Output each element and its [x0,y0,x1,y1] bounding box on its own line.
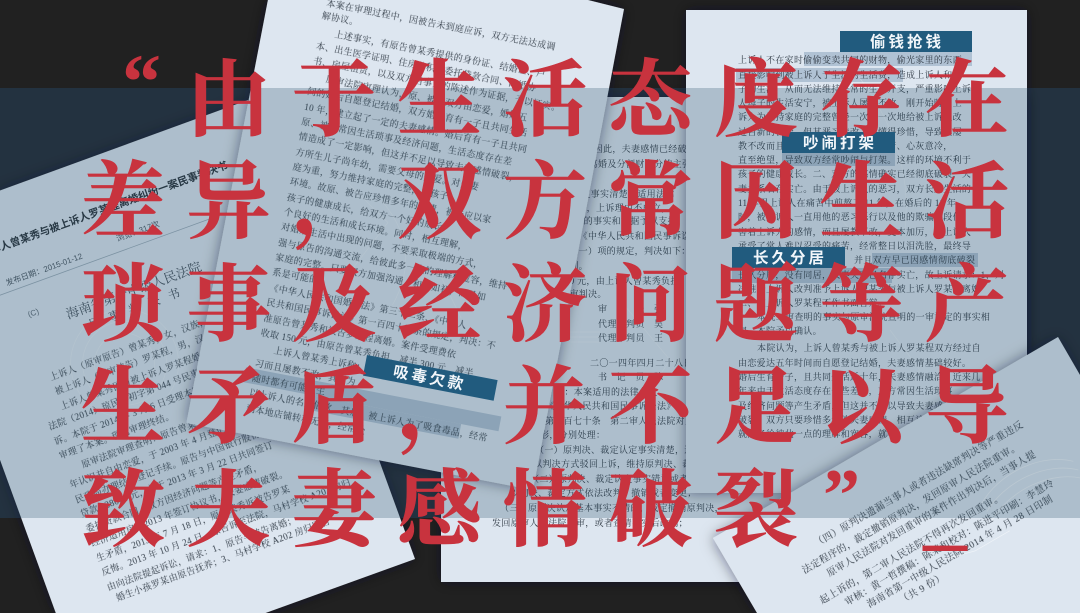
back page body text: 二〇一四年四月二十八日 [590,357,693,368]
back page body text: 审 判 长 张 [598,303,663,314]
right page body text: 诉人为维持家庭的完整曾经一次又一次地给被上诉人改 [738,111,962,122]
left page body text: 婚生小孩罗某由原告抚养；3、马村学校 A202 房归原告 [114,515,332,603]
back page watermark [570,300,670,420]
right page body text: 直至绝望，导致双方经常吵闹与打架。这样的环境不利于 [738,154,971,166]
left page document type: 民事判决书 [87,282,190,332]
left page body text: 贷款 128000 元，并于 2013 年 3 月 22 日共同签订 [79,439,275,520]
left page body text: 委托贷款合同，双方因经济问题等产生矛盾， [84,460,263,535]
left page body text: 被上诉人（原审被告）罗某程，男，汉族 [53,329,215,397]
back page body text: 依照《中华人民共和国民事诉讼法》 [560,230,709,241]
back page body text: 附：本案适用的法律条文 [555,386,658,397]
left page body text: 法院（2014）琼民一初字第 044 号民事判决，向本院提 [47,344,263,433]
right page body text: 教不改而且还吸毒，使上诉人十分痛苦、心灰意冷， [738,140,953,152]
back page body text: 书 记 员 陈 [598,371,664,382]
label: stealing money: 偷钱抢钱 [870,32,944,51]
centre page body text: 民共和国民事诉讼法》第一百四十四条的规定，判决：不 [266,296,497,352]
right page body text: 由恋爱达五年时间而自愿登记结婚，夫妻感情基础较好。 [738,357,971,369]
centre page body text: 原审法院审理认为，原、被告双方由恋爱，婚姻五 [325,73,529,124]
left page body text: 原审法院审理查明：原告曾某秀与被告罗某程于 2003 年 4 月 [80,374,318,470]
right page body text: 妻关系名存实亡。由于被上诉人的恶习，双方长期生活的 [738,183,971,195]
centre page body text: 上述事实，有原告曾某秀提供的身份证、结婚证、户 [333,28,546,81]
right page body text: 年来由于生活态度存在一些差异，双方常因生活琐事 [738,385,953,397]
back page body text: 发回原审人民法院重审，或者查清事实后改判； [492,517,688,529]
right page body text: 过自新的机会，但其恶习难改，不懂得珍惜，导致其屡 [738,126,962,138]
back page body text: 认定事实清楚，适用法律 [572,188,675,200]
back page body text: （三）原判决认定基本事实不清的，裁定撤销原判决， [500,502,724,514]
back page body text: 代理审判员 吴 [598,318,663,329]
bottom right page body text: 起上诉的，第二审人民法院不得再次发回重审。 [818,491,1005,607]
centre page body text: 方所生儿子尚年幼，需要父母的关爱。对夫妻 [295,146,481,193]
centre page body text: 上诉人曾某秀上诉称： [273,344,367,373]
right page watermark [830,60,920,410]
right page body text: 孩子的健康成长。二、双方的感情确实已经彻底破裂，夫 [738,168,971,180]
centre page body text: 原、被告常因生活琐事及经济问题，生活态度存在差 [300,116,513,168]
horizontal tint band [0,88,1080,518]
centre page body text: 到本地店铺转租无奈，经常赴 [245,402,367,437]
left page body text: 诉。本院于 2014 年 3 月 6 日受理本案后，依法 [52,370,239,448]
title quotation: 由于生活态度存在 [186,55,1031,148]
right page body text: 并且双方早已因感情彻底破裂 [854,254,975,265]
bottom right page watermark [925,443,1080,566]
back page body text: 《中华人民共和国民事诉讼法》 [545,400,676,411]
left page body text: 上诉人（原审原告）曾某秀，女，汉族，不服 [48,308,227,383]
back page body text: （一）原判决、裁定认定事实清楚，适用法律 [535,444,722,456]
label: stealing money [840,31,972,52]
right page body text: 决准予上诉人改判准予上诉人曾某秀与被上诉人罗某程离婚 [738,283,981,294]
centre page contents [237,8,571,462]
right page body text: 破裂。双方只要珍惜多年的夫妻感情，相互谅解， [738,414,943,426]
back page body text: 形，分别处理： [540,429,605,441]
centre page body text: 孩子的健康成长，给双方一个好的成长 [286,191,444,233]
left page body text: 经济适用房，2013 年签订协议书，夫妻感情破裂。 [89,467,289,549]
right page body text: 及经济问题等产生矛盾，但这并不足以导致夫妻感情 [738,400,953,412]
back page body text: 以判决、裁定方式依法改判、撤销或者变更； [510,487,697,498]
label: quarrelling and fighting: 吵闹打架 [803,133,877,152]
bottom right page body text: 法定程序的，裁定撤销原判决，发回原审人民法院重审。 [800,440,1022,576]
right page body text: 本院二审查明的事实与原审法院查明的一审认定的事实相 [757,311,990,322]
centre page body text: 系是可能的。 [272,266,329,287]
back page body text: 充分的事实和证据予以支持 [565,215,677,226]
title quotation: 差异，双方常因生活 [81,157,1031,251]
centre page body text: 家庭的完整。只要双方加强沟通，和好如初，而且如 [274,251,487,303]
centre page watermark [314,172,484,318]
left page publication date: 发布日期：2015-01-12 [4,250,84,288]
panel: back judgment page [441,97,1027,582]
right page body text [738,54,1004,440]
centre page body text: 收取 150 元，由原告曾某秀负担，减半 300 元，减半 [260,327,475,379]
bottom right page body text: （四）原判决遗漏当事人或者违法缺席判决等严重违反 [812,419,1025,550]
centre page body text: 本、出生医学证明、住房公积金委托贷款合同、离婚协 [315,40,538,93]
left page body text: 审理了本案。现已审理终结。 [57,409,175,461]
title closing dash: — [923,521,967,570]
back page body text: （二）原判决、裁定认定事实错误或者适用法 [530,473,717,484]
back page body text: 终审判决。 [560,288,607,299]
left page corner mark: (C) [27,307,40,319]
back page body text: 恰当，上诉理由不成立， [568,202,671,214]
centre page body text: 环境。故原、被告应珍惜多年的感情，被告应以家 [289,175,493,226]
centre page body text: 10 年，建立起了一定的夫妻感情。婚后育有一子且共同 [303,101,528,155]
back page body text: 300 元，由上诉人曾某秀负担。 [560,275,689,287]
left page watermark [55,294,194,433]
bottom right page body text [791,419,1072,613]
centre page body text [245,9,570,462]
bottom right page body text: 海南省第一中级人民法院 2014 年 4 月 28 日印制 [865,493,1055,610]
centre page body text: 习而且屡教不改，其行为 [254,357,357,388]
back page body text: 请求离婚及分割财产分的主张 [570,158,691,169]
right page body text: 承受了常人难以忍受的痛苦，经常整日以泪洗脸，最终导 [738,240,971,252]
back page body text: 第（一）项的规定，判决如下： [560,245,691,257]
right page body text: 长久分居，没有同居，夫妻关系已名存实亡，故上诉请求：1、判 [738,269,1004,281]
label: quarrelling and fighting [782,132,895,153]
highlights on centre page [240,367,501,446]
right page body text: 同，本院予以确认。 [738,325,822,337]
panel: centre judgment page [186,0,624,490]
centre page body text: 《中华人民共和国婚姻法》第三十二条、《中华人 [269,281,468,330]
right page body text: 人母子的生活安宁，被上诉人屡教不改，刚开始时，上 [738,97,962,109]
right page body text: 害着上诉人的感情，而且屡教不改，变本加厉，让上诉人 [738,226,971,238]
centre page body text: 个良好的生活和成长环境。同时，相互理解， [283,206,469,253]
back page body text: 第一百七十条 第二审人民法院对上诉案件， [545,415,732,427]
back page body text: 以判决方式驳回上诉，维持原判决、裁定； [533,458,710,470]
title opening quote: “ [122,38,161,125]
right page body text: 就能多给彼此一点的理解和宽容，就 [738,428,887,440]
left page body text: 民政局办理结婚登记手续。原告与中国银行股份有限公司 [73,415,296,505]
centre page body text: 书、房屋租赁，以及双方当事人的陈述作为证据，予以证实。 [312,55,562,114]
bottom right page contents [791,406,1080,613]
left page body text: 年认识并自由恋爱，于 2003 年 4 月登记手续。于 2003 年 [68,399,294,491]
label: long separation: 长久分居 [753,249,827,267]
label: long separation [732,247,845,268]
bottom right page body text: 审核：黄一哲撰稿：陈某和校对：陈进平印刷：李慧玲 [843,477,1056,608]
centre page body text: 准原告曾某秀和被告罗某程离婚。案件受理费依 [263,312,457,360]
right page body text: 二、被上诉人罗某程不作书面答辩。 [738,297,887,308]
left page body text: 生矛盾，2013 年 7 月 18 日，原告某秀诉被告罗某 [95,483,292,564]
centre page body text: 强与原告的沟通交流，给彼此多一点的理解和宽容，维持 [277,236,508,292]
back page body text [492,143,732,529]
back page body text: 原判。 [560,260,588,271]
right page body text: 本院认为，上诉人曾某秀与被上诉人罗某程双方经过自 [757,342,981,354]
bottom right page body text: （共 9 份） [897,571,947,607]
label: drugs and debts: 吸毒欠款 [392,361,468,394]
left page body text: 由向法院提起诉讼，请求：1、原告与被告离婚； [105,513,298,593]
back page body text: 的。因此，夫妻感情已经破裂 [575,143,696,155]
title quotation: 琐事及经济问题等产 [81,260,1031,353]
right page body text: 婚后生育一子，且共同生活近十年，夫妻感情融洽，近来几 [738,371,981,383]
centre page body text: 间的婚后自愿登记结婚，双方婚后育有一子且共同生活 [306,85,528,139]
left page body text: 反悔。2013 年 10 月 24 日，原告诉至法院，马村学校 A202 房归 [100,477,353,578]
title closing quote: ” [823,455,860,537]
centre page body text: 以上诉人的名义借款，其后，被上诉人为了吸食毒品，经常 [248,387,489,444]
back page body text: 代理审判员 王 [598,332,663,343]
title quotation: 致夫妻感情破裂 [81,465,820,558]
centre page body text: 随时都有可能发生 [251,372,327,397]
bottom right page body text: 原审人民法院对发回重审的案件作出判决后，当事人提 [825,448,1038,579]
centre page body text: 庭为重，努力维持家庭的完整，为孩子。原 [292,161,468,206]
panel: left judgment page [0,100,415,613]
centre page body text: 情造成了一定影响，但这并不足以导致夫妻感情破裂， [298,130,520,184]
left page body text: 上诉人曾某秀因与被上诉人罗某程婚姻纠纷一案，不服 [59,325,273,412]
centre page body text: 对婚姻生活中出现的问题，不要采取极端的方式， [280,221,484,271]
panel: bottom right judgment page [713,337,1080,613]
label: drugs and debts [363,355,498,401]
right page body text: 直接影响到被上诉人于生活的生活费，造成上诉人和孩 [738,69,963,81]
left page court name: 海南省第一中级人民法院 [64,259,203,322]
right page body text: 11 年里上诉人在痛苦中煎熬了 11 年，在婚后的 11 年 [738,197,956,209]
left page body text [31,287,364,605]
left page contents [0,150,379,611]
panel: right judgment page [686,10,1027,493]
highlights on right page [732,52,978,283]
right page body text: 时，被上诉人一直用他的恶习恶行以及他的欺骗手段伤 [738,211,962,223]
centre page body text: 解协议。 [321,9,360,27]
left page view count: 浏览：317次 [115,218,161,243]
right page body text: 子的生活，从而无法维持正常的生活开支，严重影响上诉 [738,83,971,95]
title quotation: 生矛盾，并不足以导 [81,362,1031,456]
right page body text: 上诉人不在家时偷偷变卖共同的财物，偷光家里的东西， [738,54,971,66]
title quotation [81,38,1031,570]
